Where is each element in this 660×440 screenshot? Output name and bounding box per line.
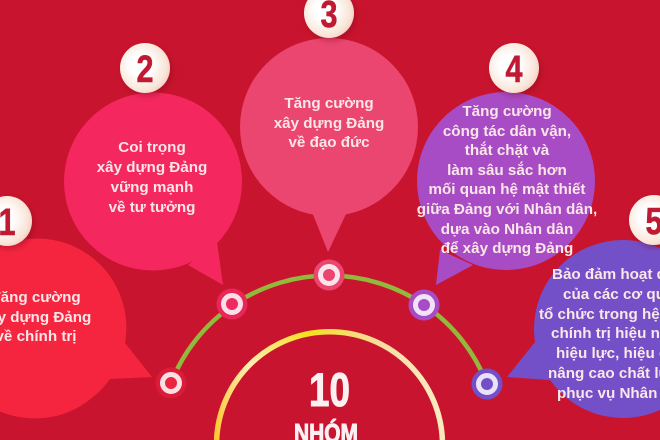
text: bubble 4 <box>417 103 597 257</box>
text: bubble 3 <box>274 95 384 151</box>
text: bubble 4: để xây dựng Đảng <box>441 240 573 257</box>
panel: bubble 2 <box>64 92 242 285</box>
text: bubble 2: xây dựng Đảng <box>97 159 207 176</box>
center heading <box>294 363 358 440</box>
node 2 <box>216 288 248 320</box>
text: bubble 4: công tác dân vận, <box>443 123 571 140</box>
panel: bubble 3 <box>240 38 418 252</box>
text: bubble 4: giữa Đảng với Nhân dân, <box>417 201 597 218</box>
badge: number 2 <box>120 43 170 93</box>
connecting green arc <box>171 276 487 384</box>
text: bubble 2: về tư tưởng <box>109 199 195 216</box>
badge: number 1 <box>0 196 32 246</box>
text: bubble 4: thắt chặt và <box>465 141 550 159</box>
text: bubble 1 <box>0 289 91 345</box>
badge: number 4: 4 <box>506 49 522 91</box>
text: bubble 3: về đạo đức <box>288 134 370 151</box>
text: bubble 2: Coi trọng <box>118 139 186 156</box>
badge: number 5 <box>629 195 660 245</box>
text: bubble 4: Tăng cường <box>462 103 552 120</box>
node 1 <box>156 368 186 398</box>
text: bubble 3: Tăng cường <box>284 95 374 112</box>
text: bubble 3: xây dựng Đảng <box>274 115 384 132</box>
text: bubble 2 <box>97 139 207 216</box>
center heading: 10 <box>309 363 350 416</box>
badge: number 4 <box>489 43 539 93</box>
node 5 <box>472 368 502 400</box>
text: bubble 4: dựa vào Nhân dân <box>441 221 573 238</box>
text: bubble 2: vững mạnh <box>111 179 193 196</box>
panel: bubble 4 <box>417 92 597 285</box>
node 4 <box>408 290 440 320</box>
text: bubble 4: mối quan hệ mật thiết <box>429 181 585 198</box>
text: bubble 4: làm sâu sắc hơn <box>447 161 567 179</box>
panel: bubble 1 <box>0 239 152 418</box>
node 3 <box>314 260 344 290</box>
inner gold ring <box>217 332 442 440</box>
panel: bubble 5 <box>507 240 660 418</box>
text: bubble 5 <box>539 266 660 402</box>
badge: number 3 <box>304 0 354 38</box>
badge: number 2: 2 <box>136 49 154 91</box>
